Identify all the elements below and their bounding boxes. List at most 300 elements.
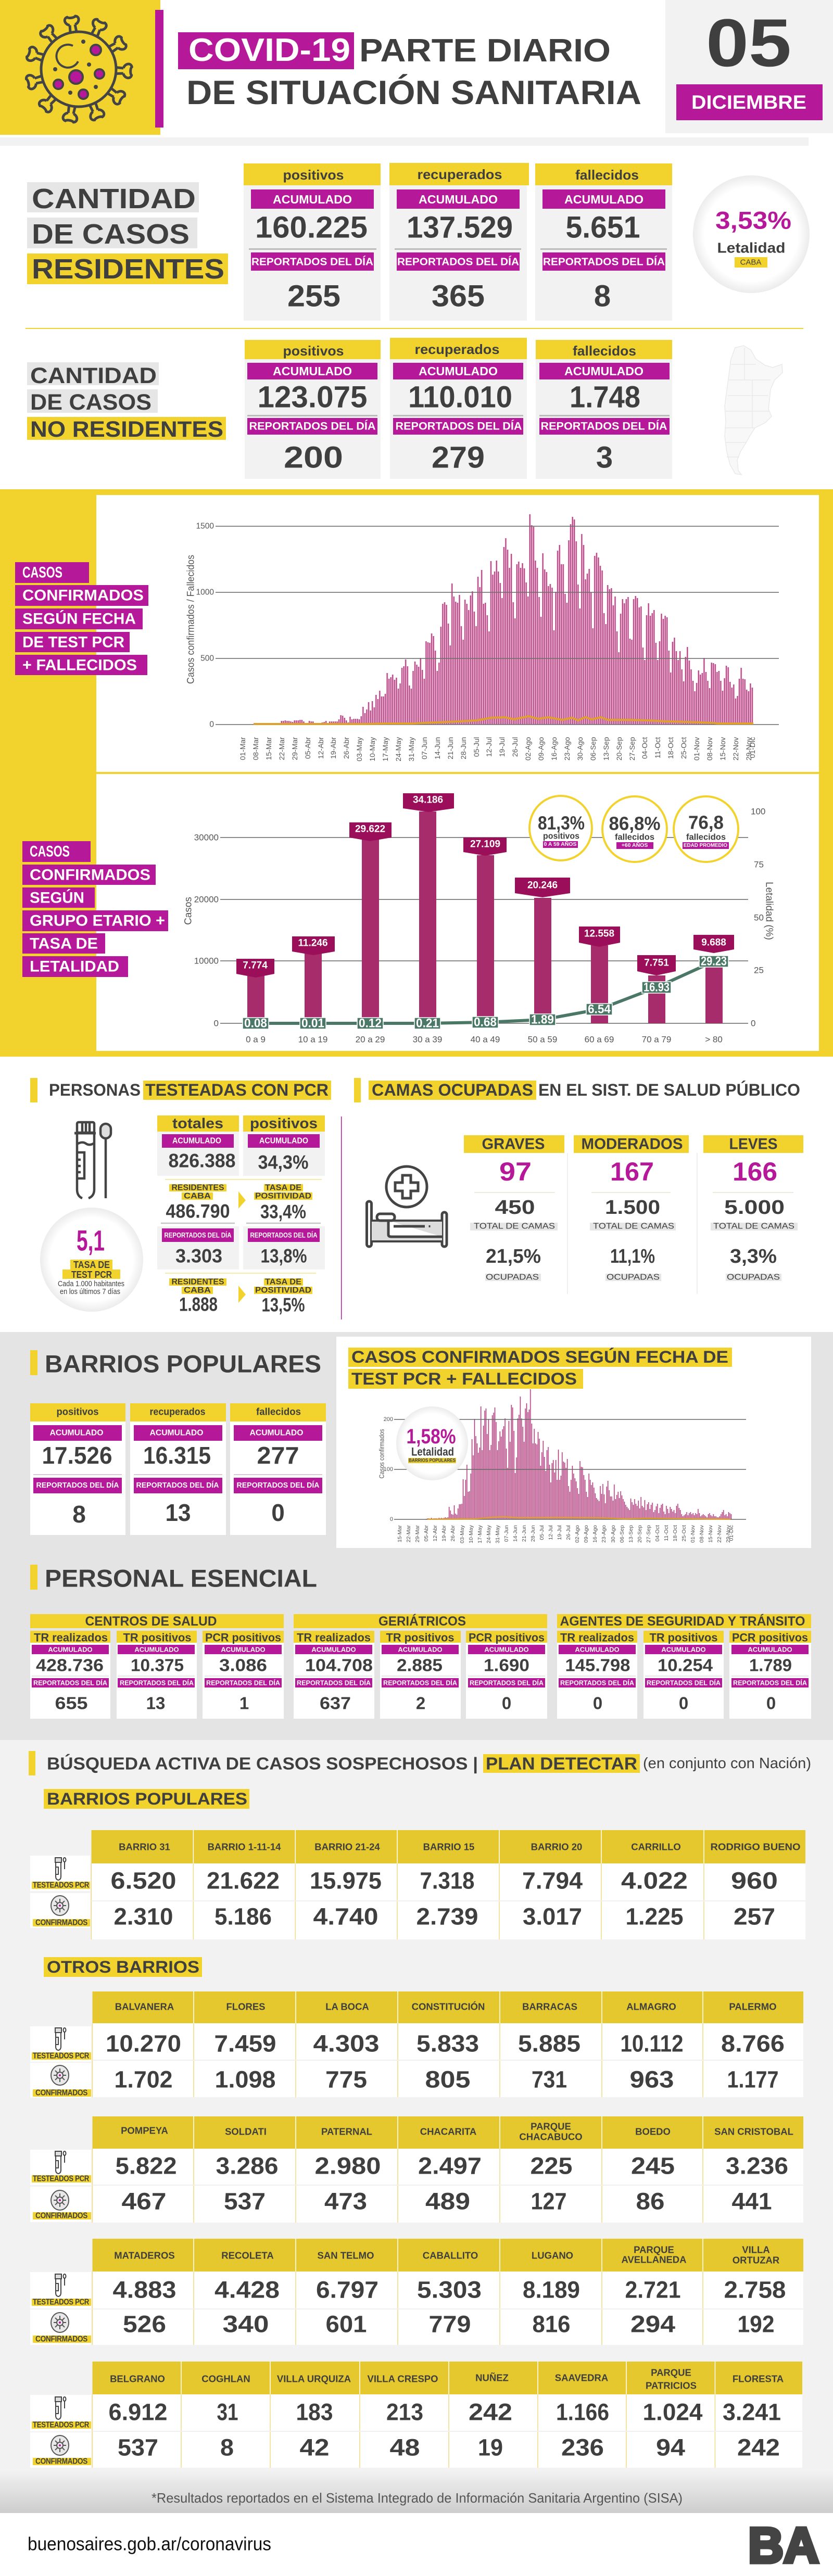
table: otros barrios 2: [93, 2116, 803, 2223]
panel: geriátricos: REPORTADOS DEL DÍA: [297, 1679, 371, 1686]
chart: barrios populares bars: 12-Abr: [432, 1525, 438, 1542]
chart: barrios populares bars: 04-Oct: [654, 1525, 661, 1542]
heading: barrios populares: BARRIOS POPULARES: [45, 1350, 321, 1377]
table: otros barrios 1: 805: [425, 2066, 471, 2092]
panel: barrios populares fallecidos: 277: [257, 1442, 299, 1469]
axis labels: 30000: [194, 833, 219, 842]
heading: residentes: [27, 182, 228, 285]
chart: barrios populares bars: 03-May: [459, 1525, 465, 1543]
table: otros barrios 1: 1.177: [727, 2066, 779, 2092]
table: otros barrios 1: [93, 1991, 803, 2097]
panel: reportados del día: 13,8%: [260, 1245, 307, 1267]
chart: casos y letalidad por grupo etario: 16.93: [643, 981, 670, 994]
chart: barrios populares bars: 200: [384, 1416, 393, 1423]
chart: casos confirmados y fallecidos por fecha: 19-Jul: [498, 737, 506, 757]
panel: no residentes positivos: REPORTADOS DEL DÍA: [249, 421, 376, 432]
panel: agentes de seguridad y tránsito: ACUMULADO: [575, 1646, 620, 1653]
panel: agentes de seguridad y tránsito: 145.798: [565, 1655, 630, 1675]
chart: barrios populares bars: 19-Jul: [557, 1525, 563, 1540]
chart: casos confirmados y fallecidos por fecha: 20-Sep: [615, 737, 623, 760]
axis labels: 0: [214, 1018, 219, 1029]
panel: no residentes recuperados: recuperados: [414, 341, 500, 357]
chart: casos y letalidad por grupo etario: 30 a 39: [413, 1035, 442, 1044]
table: otros barrios 1: 4.303: [313, 2030, 379, 2057]
chart: barrios populares bars: Casos confirmados: [378, 1429, 385, 1478]
date panel: DICIEMBRE: [691, 92, 806, 113]
chart: casos confirmados y fallecidos por fecha: 11-Oct: [653, 737, 662, 758]
table: otros barrios 3: 2.721: [625, 2277, 681, 2303]
heading: personal esencial: PERSONAL ESENCIAL: [45, 1565, 317, 1592]
title: [178, 32, 641, 111]
chart: casos y letalidad por grupo etario: Casos: [183, 897, 194, 925]
chart: casos y letalidad por grupo etario: 6.54: [588, 1003, 611, 1016]
chart: casos y letalidad por grupo etario: 40 a 49: [471, 1035, 500, 1044]
chart: casos confirmados y fallecidos por fecha: 15-Mar: [264, 737, 273, 760]
panel: positivos acumulado: [243, 1115, 325, 1176]
callout: letalidad CABA: [693, 175, 810, 293]
chart: casos confirmados y fallecidos por fecha: 26-Abr: [342, 737, 350, 759]
callout: tasa de test PCR: en los últimos 7 días: [60, 1288, 120, 1296]
chart: barrios populares bars: 21-Jun: [521, 1525, 527, 1542]
chart: casos y letalidad por grupo etario: 0.68: [474, 1015, 497, 1030]
chart: barrios populares bars: 14-Jun: [512, 1525, 519, 1542]
callout: 81,3% positivos: [529, 796, 592, 860]
panel: geriátricos: GERIÁTRICOS: [378, 1614, 466, 1629]
callout: 81,3% positivos: positivos: [543, 831, 579, 841]
panel: gray section background: [0, 1332, 833, 1740]
block: residentes CABA reportados y positividad: 1.888: [179, 1294, 218, 1315]
callout: letalidad barrios populares: [396, 1406, 468, 1480]
callout: 86,8% fallecidos: fallecidos: [615, 832, 654, 842]
date panel: 05: [706, 5, 791, 81]
panel: no residentes fallecidos: fallecidos: [573, 343, 636, 359]
table: otros barrios 4: 242: [737, 2434, 780, 2461]
table: barrios populares: 960: [731, 1868, 778, 1894]
panel: barrios populares recuperados: ACUMULADO: [150, 1428, 203, 1438]
chart: casos y letalidad por grupo etario: 50 a 59: [528, 1035, 557, 1044]
row labels: barrios populares: TESTEADOS PCR: [33, 1881, 89, 1889]
panel: totales acumulado: ACUMULADO: [172, 1137, 221, 1145]
label: casos confirmados según fecha: CONFIRMADOS: [22, 587, 144, 604]
panel: residentes fallecidos: ACUMULADO: [564, 193, 643, 206]
table: otros barrios 4: 213: [386, 2399, 423, 2426]
panel: centros de salud: ACUMULADO: [48, 1646, 93, 1653]
panel: camas leves: 5.000: [724, 1197, 785, 1219]
panel: barrios populares fallecidos: REPORTADOS DEL DÍA: [236, 1481, 320, 1490]
axis labels: 20000: [194, 894, 219, 905]
heading: personas testeadas con PCR: PERSONAS: [49, 1081, 141, 1099]
panel: residentes fallecidos: fallecidos: [575, 167, 639, 183]
block: residentes CABA reportados y positividad: TASA DE: [265, 1277, 301, 1287]
table: otros barrios 4: NUÑEZ: [475, 2372, 509, 2383]
table: otros barrios 3: SAN TELMO: [318, 2250, 374, 2261]
chart: casos y letalidad por grupo etario: 29.622: [355, 823, 385, 835]
block: residentes CABA y tasa de positividad: POSITIVIDAD: [255, 1192, 311, 1200]
panel: agentes de seguridad y tránsito: REPORTADOS DEL DÍA: [647, 1679, 721, 1686]
panel: geriátricos: TR realizados: [297, 1631, 371, 1644]
axis labels: 50: [754, 913, 764, 922]
panel: camas graves: OCUPADAS: [486, 1273, 539, 1281]
chart: barrios populares bars: 30-Ago: [610, 1525, 616, 1543]
chart: barrios populares bars: 01-Dic: [728, 1525, 735, 1541]
panel: no residentes positivos: 200: [284, 440, 343, 475]
chart: casos confirmados y fallecidos por fecha: 29-Mar: [291, 737, 299, 760]
panel: agentes de seguridad y tránsito: PCR positivos: [732, 1631, 808, 1644]
label: casos según grupo etario: SEGÚN: [30, 889, 84, 907]
panel: residentes recuperados: [389, 163, 529, 321]
panel: no residentes fallecidos: 3: [596, 440, 613, 475]
panel: geriátricos: 2: [416, 1694, 425, 1712]
table: otros barrios 4: 1.166: [556, 2399, 609, 2426]
panel: totales acumulado: totales: [172, 1115, 223, 1132]
panel: centros de salud: 655: [55, 1694, 87, 1712]
subheading: otros barrios: OTROS BARRIOS: [47, 1958, 199, 1976]
callout: letalidad barrios populares: 1,58%: [406, 1425, 456, 1448]
chart: casos confirmados y fallecidos por fecha: 01-Mar: [238, 737, 247, 760]
panel: agentes de seguridad y tránsito: ACUMULADO: [661, 1646, 706, 1653]
axis labels: [194, 807, 765, 1029]
heading: personas testeadas con PCR: TESTEADAS CON PCR: [145, 1081, 329, 1099]
table: barrios populares: 1.225: [626, 1903, 683, 1930]
chart: casos confirmados y fallecidos por fecha: 12-Abr: [317, 737, 325, 759]
title: DE SITUACIÓN SANITARIA: [186, 73, 641, 111]
chart: casos confirmados y fallecidos por fecha: 25-Oct: [679, 737, 688, 759]
table: otros barrios 4: 42: [300, 2434, 329, 2461]
callout: tasa de test PCR: TEST PCR: [71, 1270, 112, 1280]
chart: barrios populares bars: 05-Abr: [423, 1525, 430, 1542]
chart: casos confirmados y fallecidos por fecha: 09-Ago: [537, 737, 545, 760]
panel: barrios populares fallecidos: ACUMULADO: [250, 1428, 303, 1438]
heading: búsqueda activa: PLAN DETECTAR: [486, 1754, 637, 1773]
icon: virus: [26, 16, 132, 123]
table: barrios populares: 257: [734, 1903, 775, 1930]
table: barrios populares: [92, 1830, 805, 1939]
table: otros barrios 3: 601: [326, 2311, 367, 2337]
chart: casos confirmados y fallecidos por fecha: 22-Mar: [277, 737, 286, 760]
panel: barrios populares recuperados: recuperados: [150, 1406, 205, 1418]
chart: casos confirmados y fallecidos por fecha: 22-Nov: [731, 737, 740, 760]
chart: casos confirmados y fallecidos por fecha: 500: [200, 654, 214, 663]
panel: no residentes recuperados: ACUMULADO: [419, 364, 498, 378]
chart: barrios populares bars: 01-Nov: [690, 1525, 696, 1543]
table: otros barrios 1: 1.098: [214, 2066, 276, 2092]
row labels: otros barrios 1: [30, 2026, 91, 2098]
row labels: otros barrios 4: TESTEADOS PCR: [33, 2420, 89, 2430]
callout: 76,8 fallecidos edad promedio: 76,8: [688, 812, 724, 833]
panel: residentes positivos: ACUMULADO: [273, 193, 352, 206]
label: casos según grupo etario: LETALIDAD: [30, 958, 119, 975]
table: otros barrios 4: 31: [217, 2399, 238, 2426]
label: casos según grupo etario: CONFIRMADOS: [30, 866, 150, 884]
heading: camas ocupadas: EN EL SIST. DE SALUD PÚBLICO: [538, 1081, 800, 1099]
chart: barrios populares bars: 13-Sep: [628, 1525, 634, 1543]
panel: residentes positivos: REPORTADOS DEL DÍA: [251, 256, 373, 268]
table: otros barrios 3: LUGANO: [532, 2250, 573, 2261]
panel: barrios populares positivos: ACUMULADO: [50, 1428, 103, 1438]
chart: barrios populares bars: 27-Sep: [646, 1525, 652, 1543]
panel: geriátricos: [294, 1614, 547, 1719]
panel: barrios populares positivos: [30, 1403, 125, 1535]
panel: residentes fallecidos: 5.651: [565, 210, 640, 245]
table: otros barrios 3: 8.189: [523, 2277, 580, 2303]
panel: camas leves: 3,3%: [730, 1246, 777, 1267]
table: otros barrios 2: 473: [324, 2188, 367, 2214]
panel: barrios populares positivos: positivos: [56, 1406, 99, 1418]
panel: camas graves: 97: [499, 1157, 532, 1186]
panel: barrios populares positivos: REPORTADOS DEL DÍA: [36, 1481, 119, 1490]
chart: casos confirmados y fallecidos por fecha: 05-Abr: [304, 737, 312, 759]
panel: geriátricos: TR positivos: [386, 1631, 454, 1644]
panel: totales acumulado: 826.388: [169, 1150, 235, 1171]
callout: 76,8 fallecidos edad promedio: EDAD PROMEDIO: [684, 842, 727, 848]
table: otros barrios 2: 441: [732, 2188, 772, 2214]
chart: barrios populares bars: 31-May: [495, 1525, 501, 1543]
panel: centros de salud: 3.086: [219, 1655, 267, 1675]
panel: camas leves: OCUPADAS: [727, 1273, 780, 1281]
table: otros barrios 4: 19: [478, 2434, 503, 2461]
chart: barrios populares bars: 25-Oct: [681, 1525, 687, 1542]
panel: centros de salud: REPORTADOS DEL DÍA: [120, 1679, 194, 1686]
label: casos confirmados según fecha: [15, 562, 148, 675]
panel: centros de salud: ACUMULADO: [221, 1646, 266, 1653]
chart: casos y letalidad por grupo etario: 60 a 69: [585, 1035, 614, 1044]
chart: casos confirmados y fallecidos por fecha: 27-Sep: [628, 737, 636, 760]
panel: reportados del día: REPORTADOS DEL DÍA: [250, 1232, 318, 1239]
table: otros barrios 1: LA BOCA: [325, 2001, 369, 2012]
table: otros barrios 1: FLORES: [226, 2001, 266, 2012]
chart: casos confirmados y fallecidos por fecha: 17-May: [381, 737, 389, 762]
panel: geriátricos: 0: [502, 1694, 511, 1712]
table: otros barrios 2: 2.980: [314, 2153, 381, 2179]
callout: 76,8 fallecidos edad promedio: [674, 796, 738, 862]
panel: camas graves: [464, 1135, 564, 1281]
table: otros barrios 2: PARQUE: [531, 2121, 571, 2132]
table: otros barrios 3: 5.303: [417, 2277, 482, 2303]
table: otros barrios 1: 731: [532, 2066, 567, 2092]
panel: yellow charts band: [0, 489, 833, 1057]
table: otros barrios 4: 1.024: [642, 2399, 703, 2426]
chart: casos confirmados y fallecidos por fecha: 08-Nov: [705, 737, 714, 760]
heading: búsqueda activa: [29, 1751, 811, 1775]
chart: casos confirmados y fallecidos por fecha: 16-Ago: [550, 737, 558, 760]
chart: barrios populares bars: 26-Jul: [565, 1525, 572, 1540]
panel: no residentes positivos: [245, 340, 381, 479]
chart title: TEST PCR + FALLECIDOS: [351, 1369, 577, 1388]
chart: casos confirmados y fallecidos por fecha: 01-Dic: [748, 737, 756, 758]
table: otros barrios 3: 4.883: [112, 2277, 176, 2303]
panel: barrios populares positivos: 17.526: [42, 1442, 112, 1469]
table: otros barrios 3: 2.758: [724, 2277, 786, 2303]
panel: residentes positivos: [244, 163, 381, 321]
panel: camas moderados: TOTAL DE CAMAS: [593, 1222, 674, 1230]
panel: residentes recuperados: 365: [432, 279, 485, 313]
footer url: buenosaires.gob.ar/coronavirus: [28, 2533, 271, 2555]
panel: no residentes fallecidos: REPORTADOS DEL DÍA: [540, 421, 667, 432]
table: otros barrios 2: SOLDATI: [225, 2126, 267, 2137]
label: casos confirmados según fecha: SEGÚN FECHA: [22, 610, 136, 628]
chart: casos confirmados y fallecidos por fecha: 05-Jul: [472, 737, 481, 757]
chart: casos confirmados y fallecidos por fecha: 13-Sep: [602, 737, 610, 760]
table: otros barrios 4: FLORESTA: [733, 2374, 784, 2384]
panel: geriátricos: PCR positivos: [469, 1631, 545, 1644]
panel: positivos acumulado: positivos: [250, 1115, 318, 1132]
chart: casos confirmados y fallecidos por fecha: 30-Ago: [576, 737, 584, 760]
table: barrios populares: BARRIO 1-11-14: [208, 1842, 281, 1852]
chart title: [348, 1348, 732, 1389]
table: otros barrios 3: 192: [737, 2311, 775, 2337]
chart: casos y letalidad por grupo etario: 29.23: [701, 955, 727, 968]
panel: residentes positivos: positivos: [283, 167, 344, 183]
table: otros barrios 3: 779: [429, 2311, 471, 2337]
callout: 81,3% positivos: 0 A 59 AÑOS: [544, 841, 577, 847]
table: barrios populares: 7.318: [420, 1868, 475, 1894]
chart: barrios populares bars: 18-Oct: [672, 1525, 678, 1542]
panel: geriátricos: ACUMULADO: [311, 1646, 356, 1653]
chart: barrios populares bars: 100: [384, 1466, 393, 1473]
table: barrios populares: BARRIO 21-24: [314, 1842, 380, 1852]
subheading: barrios populares: BARRIOS POPULARES: [47, 1790, 247, 1808]
chart: barrios populares bars: 11-Oct: [663, 1525, 670, 1541]
table: otros barrios 4: SAAVEDRA: [555, 2372, 608, 2383]
chart: casos y letalidad por grupo etario: 12.558: [584, 929, 614, 939]
panel: agentes de seguridad y tránsito: 1.789: [749, 1655, 792, 1675]
block: residentes CABA y tasa de positividad: RESIDENTES: [172, 1184, 224, 1192]
icon: test tube and swab: [74, 1122, 111, 1198]
row labels: otros barrios 4: CONFIRMADOS: [35, 2457, 87, 2466]
panel: agentes de seguridad y tránsito: REPORTADOS DEL DÍA: [560, 1679, 635, 1686]
label: casos según grupo etario: CASOS: [30, 843, 70, 860]
panel: camas graves: TOTAL DE CAMAS: [474, 1222, 555, 1230]
panel: residentes fallecidos: 8: [594, 279, 611, 313]
chart: casos confirmados y fallecidos por fecha: 15-Nov: [718, 737, 727, 760]
panel: reportados del día: REPORTADOS DEL DÍA: [165, 1232, 232, 1239]
table: otros barrios 4: 3.241: [723, 2399, 781, 2426]
table: otros barrios 2: CHACABUCO: [519, 2131, 583, 2142]
chart: barrios populares bars: 0: [390, 1516, 393, 1522]
row labels: otros barrios 3: TESTEADOS PCR: [33, 2298, 89, 2307]
row labels: otros barrios 2: CONFIRMADOS: [35, 2211, 87, 2220]
table: barrios populares: BARRIO 20: [531, 1842, 582, 1852]
callout: tasa de test PCR: [40, 1208, 143, 1312]
callout: letalidad barrios populares: Letalidad: [411, 1445, 454, 1458]
table: otros barrios 2: POMPEYA: [121, 2125, 168, 2136]
chart: casos confirmados y fallecidos por fecha: 10-May: [368, 737, 376, 762]
heading: personas testeadas con PCR: [30, 1078, 331, 1102]
panel: agentes de seguridad y tránsito: REPORTADOS DEL DÍA: [733, 1679, 807, 1686]
table: otros barrios 2: 127: [531, 2188, 566, 2214]
panel: agentes de seguridad y tránsito: [557, 1614, 811, 1719]
chart: barrios populares bars: 07-Jun: [503, 1525, 510, 1542]
table: otros barrios 3: 294: [630, 2311, 675, 2337]
table: otros barrios 2: BOEDO: [635, 2126, 671, 2137]
table: otros barrios 1: 10.270: [106, 2030, 181, 2057]
row labels: otros barrios 4: [30, 2395, 91, 2468]
chart: barrios populares bars: [378, 1389, 746, 1543]
chart: casos y letalidad por grupo etario: Letalidad (%): [763, 882, 775, 940]
chart: barrios populares bars: 15-Nov: [708, 1525, 714, 1543]
table: otros barrios 4: [93, 2362, 802, 2468]
table: otros barrios 4: 6.912: [108, 2399, 168, 2426]
table: barrios populares: 7.794: [522, 1868, 583, 1894]
table: otros barrios 1: BALVANERA: [115, 2001, 174, 2012]
panel: centros de salud: PCR positivos: [205, 1631, 281, 1644]
table: barrios populares: 2.739: [416, 1903, 478, 1930]
panel: no residentes recuperados: [390, 338, 527, 479]
table: barrios populares: BARRIO 15: [423, 1842, 474, 1852]
chart: casos y letalidad por grupo etario: > 80: [705, 1035, 723, 1044]
panel: barrios populares recuperados: 13: [166, 1499, 191, 1526]
chart: barrios populares bars: 06-Sep: [619, 1525, 625, 1543]
panel: camas moderados: 167: [610, 1157, 654, 1186]
panel: agentes de seguridad y tránsito: TR realizados: [560, 1631, 634, 1644]
table: barrios populares: 3.017: [523, 1903, 582, 1930]
chart: casos confirmados y fallecidos por fecha: 18-Oct: [666, 737, 675, 759]
chart: casos confirmados y fallecidos por fecha: 19-Abr: [329, 737, 337, 759]
chart: barrios populares bars: 23-Ago: [601, 1525, 607, 1543]
panel: residentes recuperados: recuperados: [418, 167, 502, 182]
footnote: *Resultados reportados en el Sistema Integrado de Información Sanitaria Argentino (SISA): [152, 2490, 683, 2506]
table: otros barrios 4: 236: [561, 2434, 604, 2461]
chart: barrios populares bars: 02-Ago: [574, 1525, 580, 1543]
table: barrios populares: 4.740: [313, 1903, 378, 1930]
table: otros barrios 2: 489: [425, 2188, 470, 2214]
chart: casos y letalidad por grupo etario: 7.774: [243, 960, 268, 971]
panel: barrios populares positivos: 8: [72, 1501, 86, 1528]
axis labels: 75: [754, 860, 764, 869]
table: otros barrios 2: 3.236: [726, 2153, 788, 2179]
panel: residentes recuperados: ACUMULADO: [419, 193, 498, 206]
table: otros barrios 2: 537: [224, 2188, 266, 2214]
heading: residentes: RESIDENTES: [32, 253, 224, 285]
block: residentes CABA y tasa de positividad: TASA DE: [265, 1184, 301, 1192]
chart: barrios populares bars: 26-Abr: [450, 1525, 456, 1542]
callout: 86,8% fallecidos: [602, 796, 667, 862]
panel: centros de salud: 1: [239, 1694, 249, 1712]
table: barrios populares: RODRIGO BUENO: [710, 1842, 801, 1852]
chart: casos y letalidad por grupo etario: 0.01: [301, 1016, 324, 1031]
chart: casos confirmados y fallecidos por fecha: 06-Sep: [589, 737, 597, 760]
row labels: barrios populares: [30, 1856, 90, 1928]
panel: centros de salud: TR positivos: [123, 1631, 192, 1644]
panel: centros de salud: 428.736: [36, 1655, 104, 1675]
panel: barrios populares fallecidos: fallecidos: [256, 1406, 301, 1418]
panel: camas graves: GRAVES: [482, 1136, 545, 1152]
table: otros barrios 1: CONSTITUCIÓN: [412, 2001, 485, 2012]
label: casos confirmados según fecha: DE TEST PCR: [22, 634, 124, 651]
panel: agentes de seguridad y tránsito: ACUMULADO: [748, 1646, 792, 1653]
table: otros barrios 4: PATRICIOS: [646, 2380, 697, 2391]
callout: letalidad barrios populares: BARRIOS POPULARES: [409, 1457, 456, 1464]
panel: geriátricos: REPORTADOS DEL DÍA: [383, 1679, 458, 1686]
heading: no residentes: [27, 362, 226, 442]
row labels: otros barrios 3: [30, 2272, 91, 2345]
table: otros barrios 3: ORTUZAR: [733, 2255, 779, 2265]
panel: centros de salud: 10.375: [131, 1655, 184, 1675]
table: otros barrios 2: CHACARITA: [420, 2126, 476, 2137]
table: otros barrios 3: 4.428: [214, 2277, 280, 2303]
panel: reportados del día: [157, 1226, 325, 1270]
chart: casos y letalidad por grupo etario: 9.688: [701, 937, 726, 948]
label: casos confirmados según fecha: + FALLECIDOS: [22, 657, 137, 674]
table: otros barrios 2: 3.286: [216, 2153, 278, 2179]
chart: casos confirmados y fallecidos por fecha: 01-Nov: [692, 737, 701, 760]
chart: barrios populares bars: 12-Jul: [548, 1525, 554, 1540]
chart: casos confirmados y fallecidos por fecha: 07-Jun: [420, 737, 428, 759]
row labels: otros barrios 2: [30, 2150, 91, 2222]
chart: casos y letalidad por grupo etario: 34.186: [413, 794, 443, 806]
panel: geriátricos: ACUMULADO: [398, 1646, 443, 1653]
panel: barrios populares recuperados: [130, 1403, 226, 1535]
